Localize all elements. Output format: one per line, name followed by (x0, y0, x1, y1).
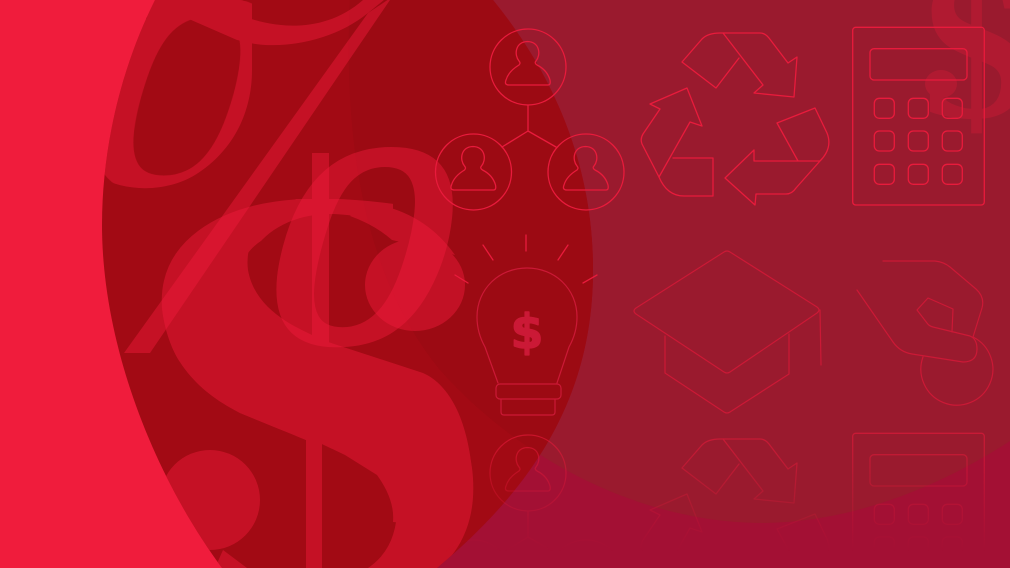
icon: calculator (853, 27, 984, 205)
percent glyph (104, 0, 453, 353)
bright red left band (0, 0, 400, 568)
large burgundy curved panel (349, 0, 1010, 523)
oval overlap shade (349, 0, 1010, 523)
icon: light bulb with dollar: $ (511, 305, 543, 360)
dark red oval panel (102, 0, 593, 568)
oversized percent and dollar glyphs (27, 0, 546, 568)
icon: people network (436, 29, 624, 210)
icon: recycle arrows (641, 33, 829, 205)
icon: light bulb with dollar (455, 235, 597, 415)
repeated faded icon row (490, 432, 985, 526)
icon: hand holding coin (857, 261, 993, 405)
icon: graduation cap (634, 251, 821, 413)
maroon lower background (222, 0, 1010, 568)
